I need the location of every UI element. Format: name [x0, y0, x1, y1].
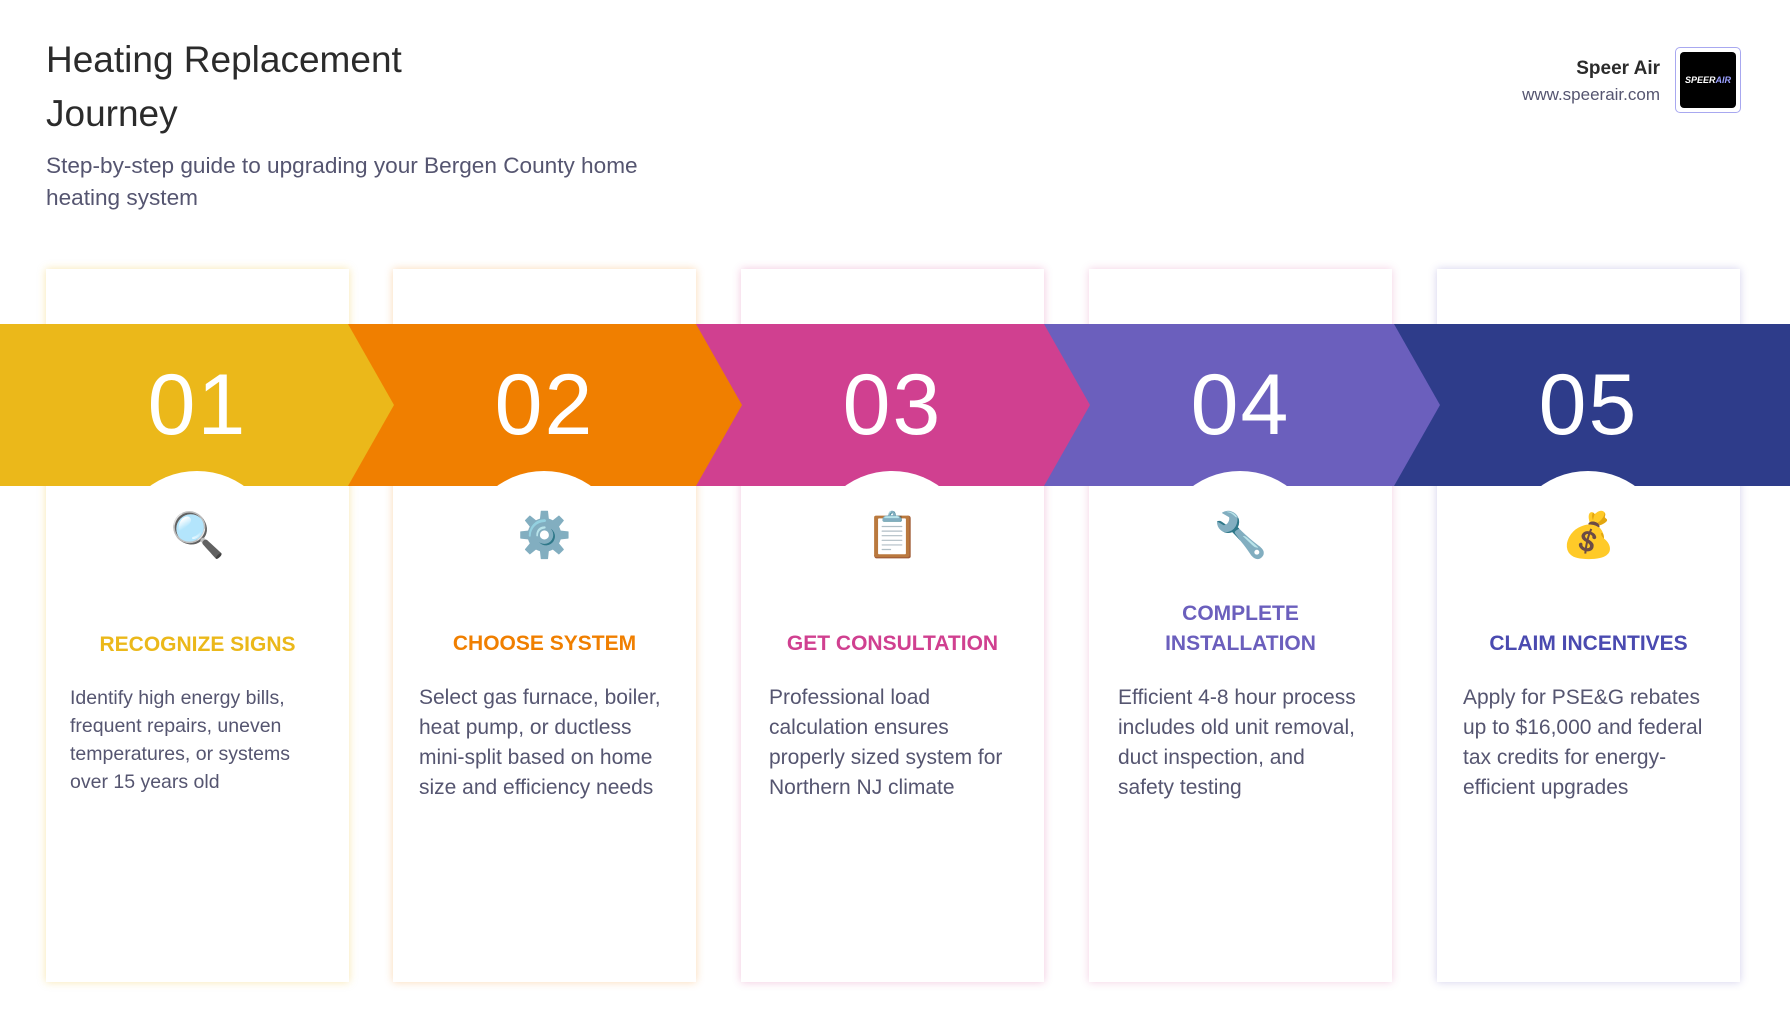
- card 4: [1089, 269, 1392, 982]
- step 5: [1463, 357, 1702, 799]
- text 4: [1118, 686, 1356, 799]
- number 02: 02: [495, 357, 594, 453]
- card 1: [46, 269, 349, 982]
- card 5: [1437, 269, 1740, 982]
- number 05: 05: [1539, 357, 1638, 453]
- step 4: [1118, 357, 1356, 799]
- logo: [1675, 47, 1741, 113]
- icon: money bag: 💰: [1561, 509, 1616, 561]
- card 3: [741, 269, 1044, 982]
- number 03: 03: [843, 357, 942, 453]
- text 4: Efficient 4-8 hour process: [1118, 686, 1356, 709]
- number 01: 01: [148, 357, 247, 453]
- text 2: heat pump, or ductless: [419, 716, 631, 739]
- card 2: [393, 269, 696, 982]
- text 5: up to $16,000 and federal: [1463, 716, 1702, 739]
- subtitle: heating system: [46, 185, 198, 210]
- text 5: tax credits for energy-: [1463, 746, 1666, 769]
- text 1: temperatures, or systems: [70, 743, 290, 765]
- logo: SPEERAIR: [1685, 75, 1731, 85]
- title: [46, 39, 402, 134]
- heading 3: GET CONSULTATION: [787, 632, 998, 655]
- text 4: safety testing: [1118, 776, 1242, 799]
- icon: clipboard: 📋: [865, 509, 920, 561]
- text 4: duct inspection, and: [1118, 746, 1305, 769]
- heading 4: [1165, 602, 1316, 655]
- text 2: Select gas furnace, boiler,: [419, 686, 661, 709]
- text 2: size and efficiency needs: [419, 776, 653, 799]
- text 3: Northern NJ climate: [769, 776, 955, 799]
- text 5: Apply for PSE&G rebates: [1463, 686, 1700, 709]
- brand block: [1522, 58, 1660, 104]
- heading 5: CLAIM INCENTIVES: [1489, 632, 1688, 655]
- heading 4: COMPLETE: [1182, 602, 1299, 625]
- heading 1: RECOGNIZE SIGNS: [99, 633, 296, 656]
- text 1: Identify high energy bills,: [70, 687, 285, 709]
- text 4: includes old unit removal,: [1118, 716, 1355, 739]
- subtitle: [46, 153, 638, 210]
- text 3: properly sized system for: [769, 746, 1002, 769]
- step 3: [769, 357, 1002, 799]
- brand block: www.speerair.com: [1522, 85, 1660, 104]
- step 2: [419, 357, 661, 799]
- number 04: 04: [1191, 357, 1290, 453]
- text 2: [419, 686, 661, 799]
- icon: magnifier: 🔍: [170, 509, 225, 561]
- title: Heating Replacement: [46, 39, 402, 80]
- text 1: frequent repairs, uneven: [70, 715, 281, 737]
- text 2: mini-split based on home: [419, 746, 652, 769]
- brand block: Speer Air: [1576, 58, 1660, 79]
- text 3: calculation ensures: [769, 716, 949, 739]
- subtitle: Step-by-step guide to upgrading your Bergen County home: [46, 153, 638, 178]
- heading 4: INSTALLATION: [1165, 632, 1316, 655]
- text 3: [769, 686, 1002, 799]
- text 1: [70, 687, 290, 793]
- text 1: over 15 years old: [70, 771, 220, 793]
- icon: wrench: 🔧: [1213, 509, 1268, 561]
- heading 2: CHOOSE SYSTEM: [453, 632, 636, 655]
- text 5: [1463, 686, 1702, 799]
- text 3: Professional load: [769, 686, 930, 709]
- step 1: [70, 357, 296, 793]
- icon: gear: ⚙️: [517, 509, 572, 561]
- text 5: efficient upgrades: [1463, 776, 1628, 799]
- title: Journey: [46, 93, 178, 134]
